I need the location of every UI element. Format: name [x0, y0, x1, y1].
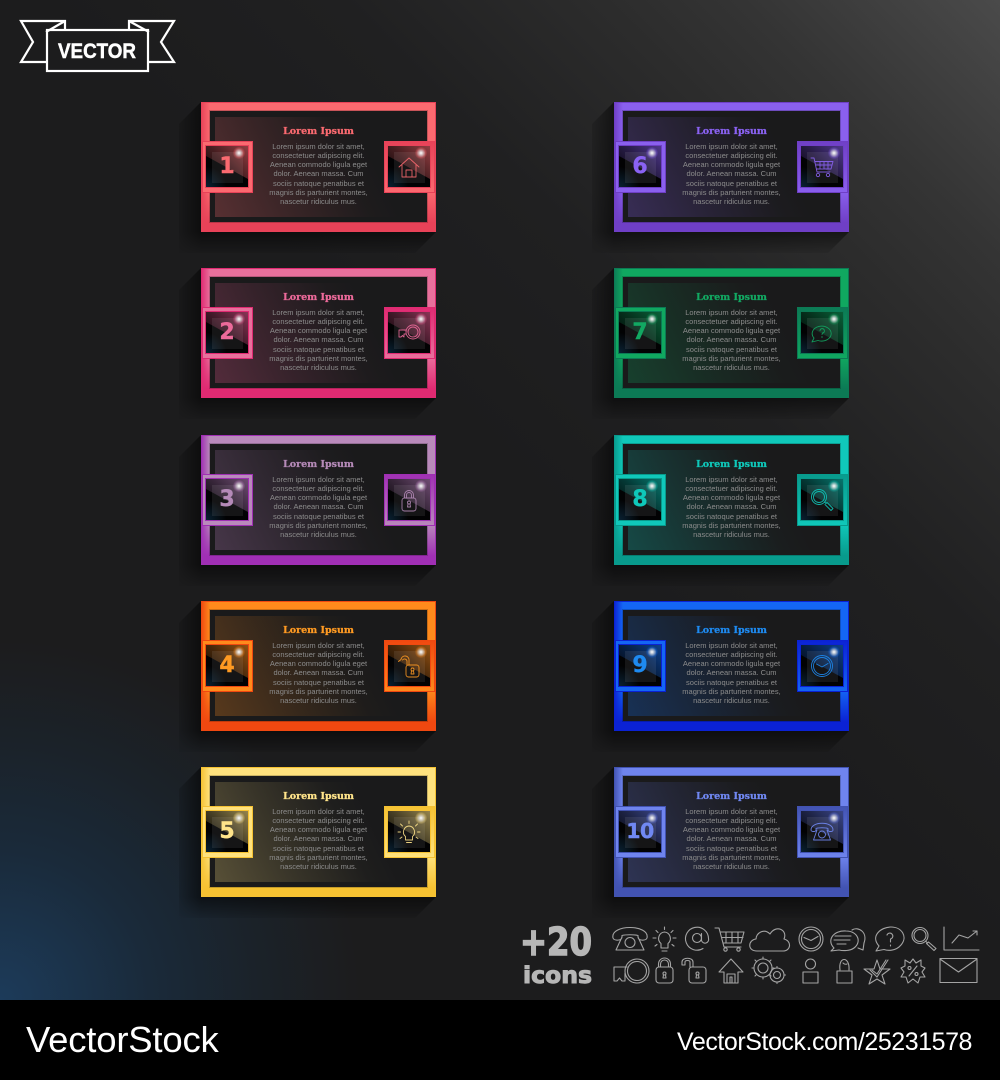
number badge 9 — [615, 640, 666, 692]
body text: magnis dis parturient montes, — [269, 521, 368, 530]
icon: key — [384, 307, 435, 359]
body text: dolor. Aenean massa. Cum — [686, 834, 777, 843]
body text: Aenean commodo ligula eget — [270, 659, 367, 668]
body text: Lorem ipsum dolor sit amet, — [272, 806, 365, 816]
icon: telephone — [613, 928, 647, 950]
icon: light bulb — [384, 806, 435, 858]
body text: Lorem ipsum dolor sit amet, — [685, 474, 778, 484]
body text: dolor. Aenean massa. Cum — [273, 668, 364, 677]
body text: sociis natoque penatibus et — [686, 512, 777, 521]
body text: nascetur ridiculus mus. — [693, 197, 770, 206]
icon: cloud — [750, 929, 790, 951]
body text: magnis dis parturient montes, — [682, 188, 781, 197]
number badge 6 — [615, 141, 666, 193]
card 7 — [600, 268, 849, 412]
body text: sociis natoque penatibus et — [686, 678, 777, 687]
body text: dolor. Aenean massa. Cum — [273, 834, 364, 843]
heading: Lorem Ipsum — [696, 624, 767, 636]
body text — [682, 142, 781, 206]
number badge 2: 2 — [219, 320, 235, 345]
body text: Lorem ipsum dolor sit amet, — [272, 308, 365, 316]
body text: magnis dis parturient montes, — [269, 188, 368, 197]
card 2 — [188, 268, 436, 408]
heading: Lorem Ipsum — [283, 790, 354, 802]
body text — [269, 474, 368, 539]
heading: Lorem Ipsum — [283, 458, 354, 470]
heading: Lorem Ipsum — [283, 292, 354, 302]
body text: nascetur ridiculus mus. — [280, 696, 357, 705]
icon: telephone — [797, 806, 848, 858]
icon: question bubble — [876, 927, 904, 951]
body text: Lorem ipsum dolor sit amet, — [272, 142, 365, 150]
body text: magnis dis parturient montes, — [682, 687, 781, 696]
body text: nascetur ridiculus mus. — [693, 862, 770, 871]
body text: sociis natoque penatibus et — [273, 345, 364, 354]
number badge 1: 1 — [219, 154, 235, 179]
icon: light bulb — [653, 927, 676, 951]
body text: consectetuer adipiscing elit. — [272, 317, 365, 326]
icon: shopping cart — [715, 928, 744, 951]
body text: sociis natoque penatibus et — [273, 678, 364, 687]
card 4 — [187, 601, 436, 744]
body text — [269, 308, 368, 372]
number badge 1 — [202, 141, 253, 193]
body text: sociis natoque penatibus et — [686, 345, 777, 354]
body text: consectetuer adipiscing elit. — [685, 816, 778, 825]
body text: Aenean commodo ligula eget — [270, 493, 367, 502]
heading: Lorem Ipsum — [696, 126, 767, 136]
icon: magnifier — [912, 928, 936, 950]
number badge 10 — [615, 806, 666, 858]
body text: dolor. Aenean massa. Cum — [686, 502, 777, 511]
icons caption: +20 icons — [520, 920, 592, 989]
body text: magnis dis parturient montes, — [682, 521, 781, 530]
body text — [682, 640, 781, 705]
icon: percent burst — [901, 959, 925, 983]
body text — [269, 806, 368, 871]
body text: nascetur ridiculus mus. — [693, 696, 770, 705]
card 9 — [602, 601, 849, 742]
body text: sociis natoque penatibus et — [273, 844, 364, 853]
icon: magnifier — [797, 474, 848, 526]
icon: at sign — [686, 927, 709, 950]
body text: Aenean commodo ligula eget — [270, 825, 367, 834]
heading: Lorem Ipsum — [696, 790, 767, 802]
icon: open lock — [682, 958, 706, 983]
number badge 7: 7 — [632, 320, 648, 345]
icon: star — [864, 960, 890, 984]
number badge 8 — [615, 474, 666, 526]
heading: Lorem Ipsum — [696, 458, 767, 470]
card 6 — [598, 102, 849, 247]
body text: Lorem ipsum dolor sit amet, — [685, 142, 778, 150]
icon: key — [614, 959, 649, 983]
number badge 3: 3 — [219, 487, 235, 512]
body text: dolor. Aenean massa. Cum — [273, 169, 364, 178]
body text: nascetur ridiculus mus. — [280, 862, 357, 871]
body text: magnis dis parturient montes, — [682, 354, 781, 363]
body text — [682, 308, 781, 372]
body text: consectetuer adipiscing elit. — [272, 650, 365, 659]
icon: envelope — [940, 958, 977, 982]
body text: Aenean commodo ligula eget — [270, 326, 367, 335]
body text: dolor. Aenean massa. Cum — [273, 335, 364, 344]
heading: Lorem Ipsum — [283, 624, 354, 636]
body text: sociis natoque penatibus et — [686, 179, 777, 188]
icon: person — [803, 959, 818, 983]
body text: consectetuer adipiscing elit. — [685, 650, 778, 659]
body text: consectetuer adipiscing elit. — [685, 151, 778, 160]
body text: sociis natoque penatibus et — [686, 844, 777, 853]
card 10 — [602, 767, 849, 908]
body text: sociis natoque penatibus et — [273, 179, 364, 188]
number badge 10: 10 — [626, 819, 654, 843]
number badge 3 — [202, 474, 253, 526]
card 5 — [182, 767, 436, 912]
body text: Aenean commodo ligula eget — [683, 659, 780, 668]
body text: Lorem ipsum dolor sit amet, — [272, 640, 365, 650]
card 3 — [188, 435, 436, 576]
body text — [682, 806, 781, 871]
body text: consectetuer adipiscing elit. — [685, 317, 778, 326]
icon: open lock — [384, 640, 435, 692]
body text: nascetur ridiculus mus. — [280, 530, 357, 539]
number badge 4 — [202, 640, 253, 692]
body text: magnis dis parturient montes, — [682, 853, 781, 862]
body text — [682, 474, 781, 539]
vector ribbon badge — [19, 20, 176, 72]
body text: dolor. Aenean massa. Cum — [686, 169, 777, 178]
body text: Aenean commodo ligula eget — [270, 160, 367, 169]
icon: clock — [799, 927, 823, 951]
body text: consectetuer adipiscing elit. — [272, 151, 365, 160]
body text: sociis natoque penatibus et — [273, 512, 364, 521]
footer logo: VectorStock — [26, 1019, 219, 1060]
icon: home — [719, 959, 743, 983]
icon: line chart — [944, 927, 979, 950]
body text: dolor. Aenean massa. Cum — [686, 335, 777, 344]
card 8 — [601, 435, 849, 576]
body text: nascetur ridiculus mus. — [693, 530, 770, 539]
number badge 6: 6 — [632, 154, 648, 179]
body text: magnis dis parturient montes, — [269, 853, 368, 862]
body text — [269, 142, 368, 206]
body text: consectetuer adipiscing elit. — [272, 484, 365, 493]
body text: magnis dis parturient montes, — [269, 354, 368, 363]
body text: dolor. Aenean massa. Cum — [686, 668, 777, 677]
body text: dolor. Aenean massa. Cum — [273, 502, 364, 511]
body text: Aenean commodo ligula eget — [683, 160, 780, 169]
icon: woman — [837, 960, 852, 983]
body text: magnis dis parturient montes, — [269, 687, 368, 696]
footer image id: VectorStock.com/25231578 — [677, 1028, 972, 1056]
icon: clock — [797, 640, 848, 692]
number badge 5 — [202, 806, 253, 858]
icons caption: +20 icons: icons — [523, 963, 592, 989]
body text: Lorem ipsum dolor sit amet, — [272, 474, 365, 484]
body text: Aenean commodo ligula eget — [683, 326, 780, 335]
icon: gears — [752, 957, 786, 984]
icon: home — [384, 141, 435, 193]
body text: Aenean commodo ligula eget — [683, 825, 780, 834]
vector ribbon badge: VECTOR — [58, 40, 136, 63]
body text: Aenean commodo ligula eget — [683, 493, 780, 502]
heading: Lorem Ipsum — [283, 126, 354, 136]
number badge 7 — [615, 307, 666, 359]
number badge 4: 4 — [219, 653, 235, 678]
body text: Lorem ipsum dolor sit amet, — [685, 806, 778, 816]
body text: consectetuer adipiscing elit. — [685, 484, 778, 493]
body text: nascetur ridiculus mus. — [693, 363, 770, 372]
icon set: 20 line icons — [612, 926, 980, 985]
icon: chat bubbles — [831, 929, 865, 951]
number badge 9: 9 — [632, 653, 648, 678]
icon: question bubble — [797, 307, 848, 359]
card 1 — [188, 102, 436, 244]
number badge 5: 5 — [219, 819, 235, 844]
heading: Lorem Ipsum — [696, 292, 767, 302]
number badge 8: 8 — [632, 487, 648, 512]
body text: Lorem ipsum dolor sit amet, — [685, 308, 778, 316]
body text — [269, 640, 368, 705]
number badge 2 — [202, 307, 253, 359]
footer bar — [0, 1000, 1000, 1080]
icon: lock — [656, 958, 673, 983]
body text: nascetur ridiculus mus. — [280, 363, 357, 372]
body text: consectetuer adipiscing elit. — [272, 816, 365, 825]
body text: nascetur ridiculus mus. — [280, 197, 357, 206]
icon: shopping cart — [797, 141, 848, 193]
icon: lock — [384, 474, 435, 526]
body text: Lorem ipsum dolor sit amet, — [685, 640, 778, 650]
